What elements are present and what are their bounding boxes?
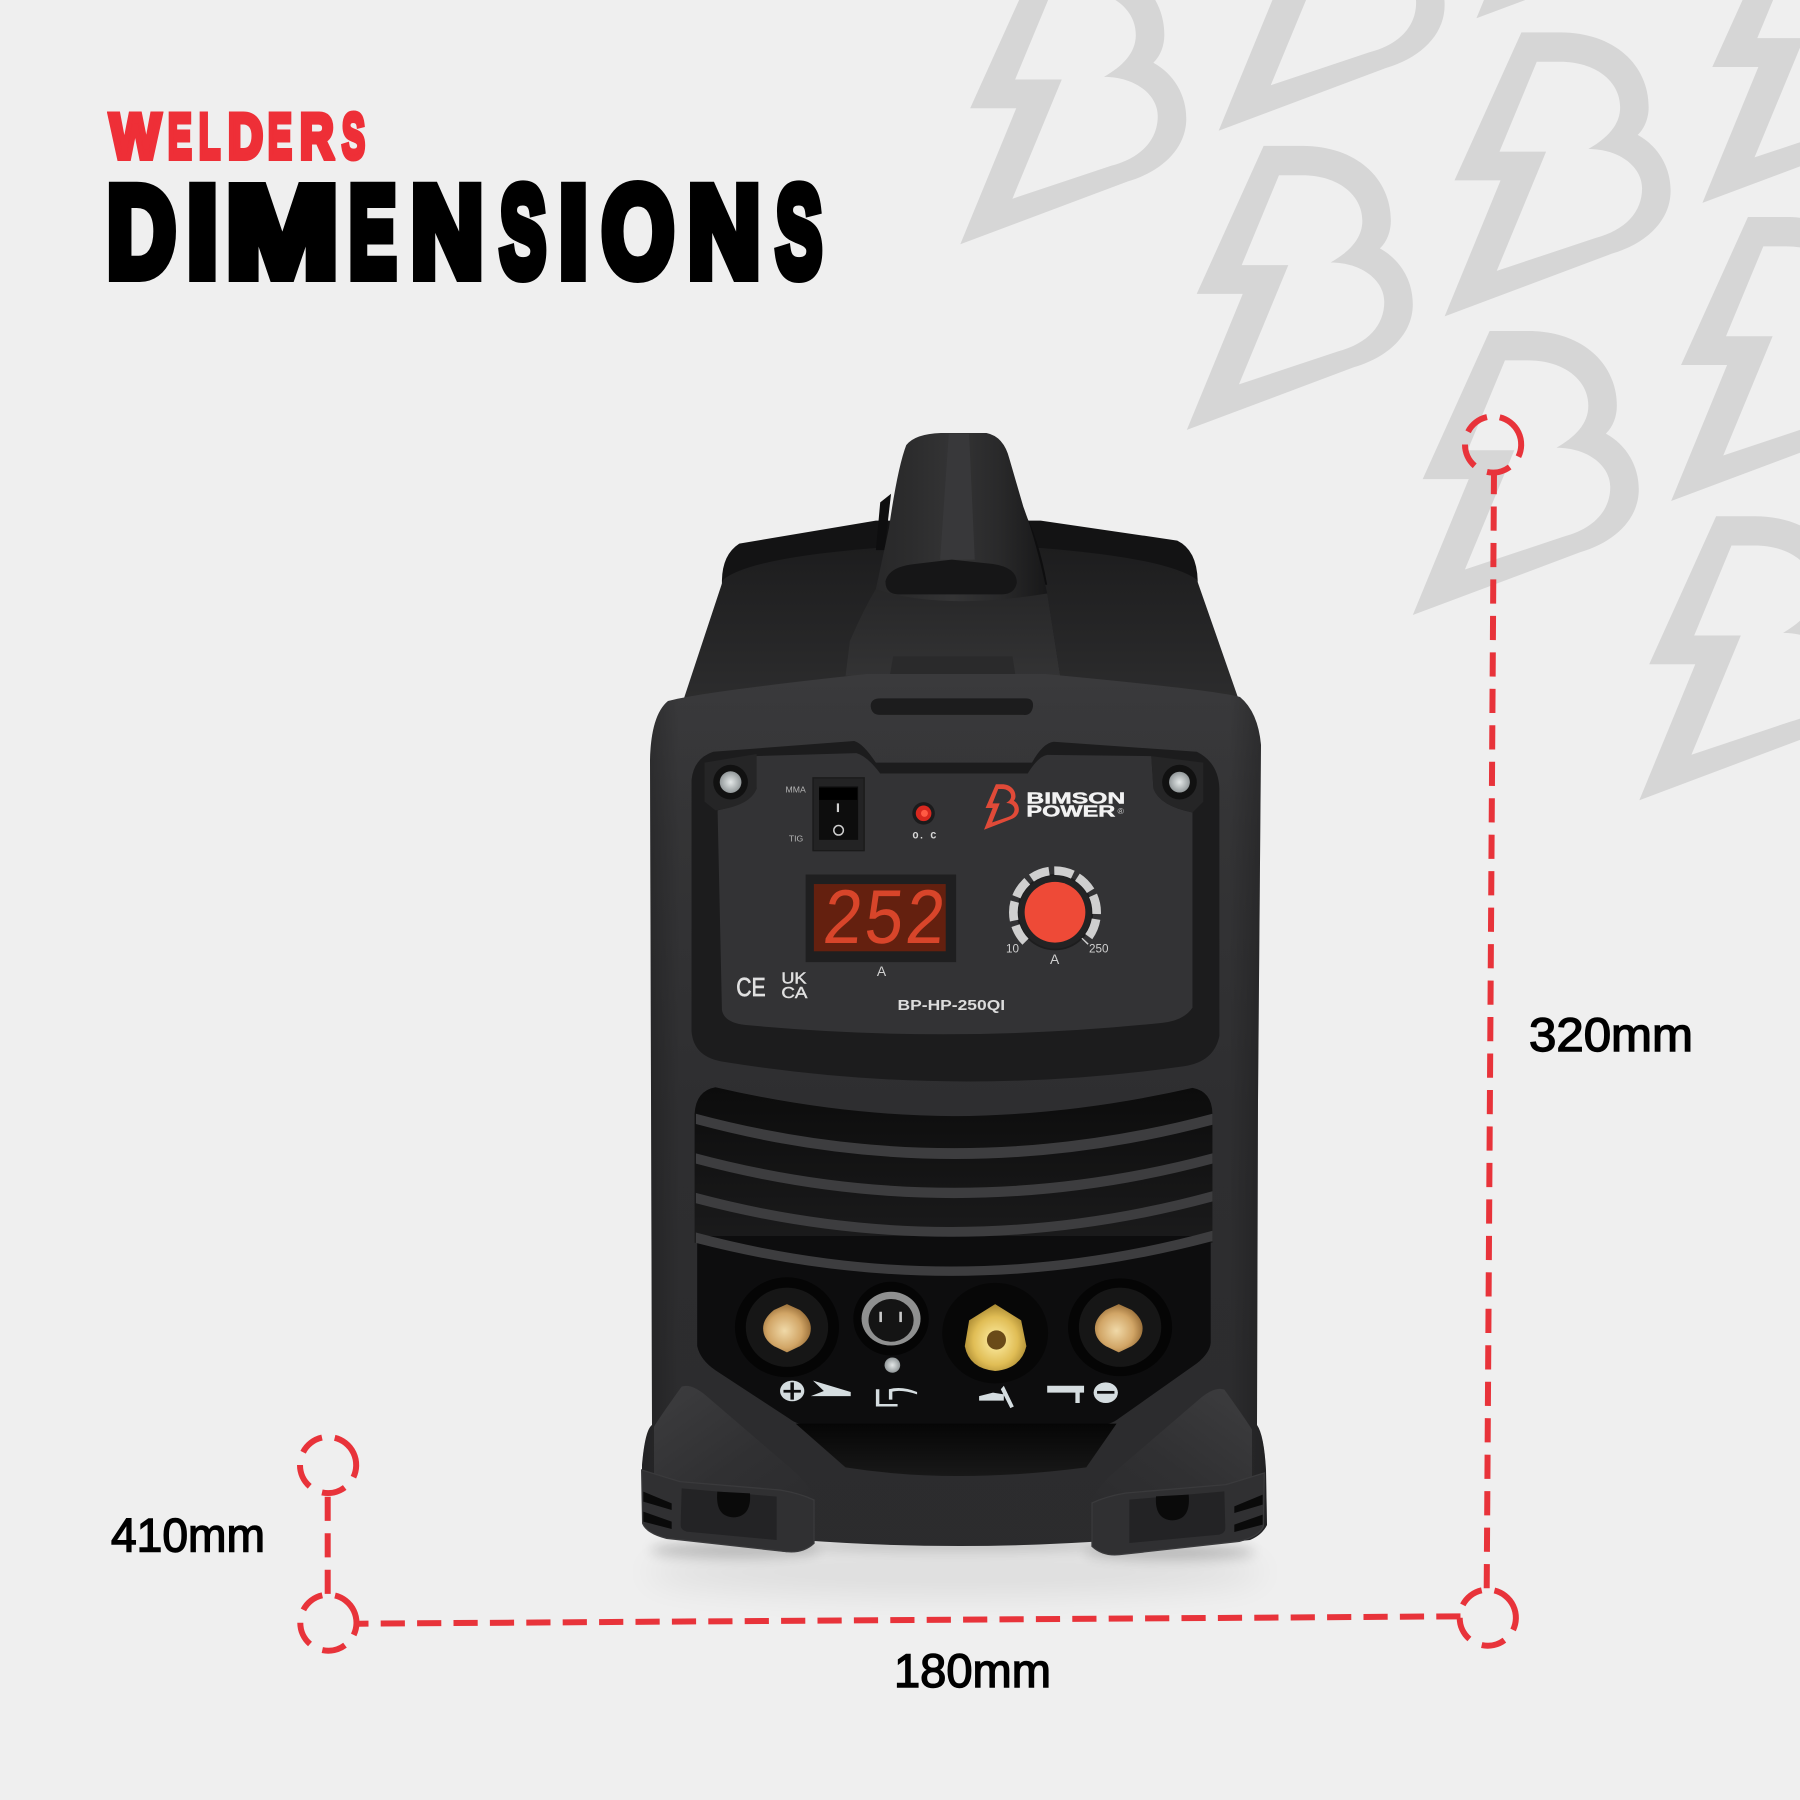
- control panel: [692, 698, 1219, 1081]
- heading: WELDERS: R: [300, 102, 333, 172]
- title block: [107, 102, 822, 304]
- welder product: [642, 433, 1267, 1596]
- control socket: [853, 1282, 929, 1373]
- digital display: A: [877, 963, 887, 979]
- current dial: 10: [1006, 943, 1019, 956]
- heading: DIMENSIONS: E: [349, 161, 396, 304]
- dimension: 320mm height line: [1460, 417, 1521, 1646]
- digital display: 252: [818, 877, 950, 968]
- panel recess: [692, 741, 1219, 1081]
- rear frame plate: [722, 521, 1198, 602]
- brand logo: POWER: [1026, 802, 1116, 820]
- mode switch: TIG: [789, 834, 804, 844]
- heading: WELDERS: E: [168, 102, 192, 172]
- brand logo: [984, 784, 1125, 830]
- heading: WELDERS: W: [110, 102, 160, 172]
- gas outlet: [942, 1283, 1048, 1383]
- heading: WELDERS: D: [228, 102, 262, 172]
- heading: WELDERS: [107, 102, 366, 172]
- lower recess: [796, 1424, 1117, 1476]
- brand logo: ®: [1117, 806, 1124, 816]
- certification marks: UK: [781, 970, 807, 987]
- body top: [684, 548, 1238, 698]
- top grip slot: [871, 698, 1033, 715]
- polarity and torch symbols: [780, 1381, 1118, 1408]
- current dial: A: [1050, 951, 1060, 967]
- heading: DIMENSIONS: N: [411, 161, 483, 304]
- dimension: 410mm depth line: [300, 1438, 356, 1651]
- overcurrent LED: O. C: [912, 831, 936, 842]
- current dial: [1006, 871, 1109, 967]
- screw brackets: [705, 754, 1203, 812]
- right foot: [1092, 1389, 1264, 1555]
- heading: DIMENSIONS: I: [558, 161, 587, 304]
- model number: BP-HP-250QI: [898, 998, 1005, 1014]
- left foot: [642, 1386, 814, 1552]
- overcurrent LED: [912, 802, 936, 842]
- vent opening: [695, 1087, 1212, 1243]
- label: 410mm: 410mm: [111, 1508, 265, 1562]
- label: 320mm: 320mm: [1529, 1008, 1693, 1061]
- brand logo: BIMSON: [1026, 789, 1125, 807]
- negative socket: [1068, 1278, 1172, 1376]
- welder rear body and handle: [684, 433, 1238, 698]
- handle grip hole: [885, 560, 1017, 594]
- positive socket: [735, 1277, 839, 1377]
- current dial: 250: [1089, 943, 1109, 956]
- front frame: [642, 674, 1267, 1552]
- heading: DIMENSIONS: S: [500, 161, 545, 304]
- vent slats: [696, 1114, 1212, 1276]
- mode switch: [786, 778, 864, 851]
- connector panel: [697, 1236, 1211, 1425]
- heading: DIMENSIONS: O: [602, 161, 674, 304]
- certification marks: CE: [736, 972, 766, 1002]
- heading: WELDERS: S: [342, 102, 365, 172]
- heading: DIMENSIONS: M: [226, 161, 339, 304]
- heading: DIMENSIONS: [107, 161, 822, 304]
- heading: DIMENSIONS: I: [187, 161, 218, 304]
- panel plate: [718, 753, 1192, 1034]
- dimension: 180mm width line: [358, 1616, 1463, 1624]
- handle: [846, 433, 1060, 676]
- watermark: repeating B logo pattern: [960, 0, 1800, 800]
- mode switch: MMA: [786, 785, 806, 795]
- label: 180mm: 180mm: [894, 1644, 1051, 1697]
- heading: DIMENSIONS: D: [107, 161, 176, 304]
- heading: DIMENSIONS: N: [688, 161, 760, 304]
- vents and connector panel: [695, 1087, 1212, 1476]
- floor shadow: [645, 1539, 1265, 1596]
- certification marks: CA: [781, 985, 808, 1002]
- heading: WELDERS: E: [268, 102, 292, 172]
- heading: DIMENSIONS: S: [776, 161, 821, 304]
- certification marks: [736, 970, 808, 1002]
- heading: WELDERS: L: [199, 102, 220, 172]
